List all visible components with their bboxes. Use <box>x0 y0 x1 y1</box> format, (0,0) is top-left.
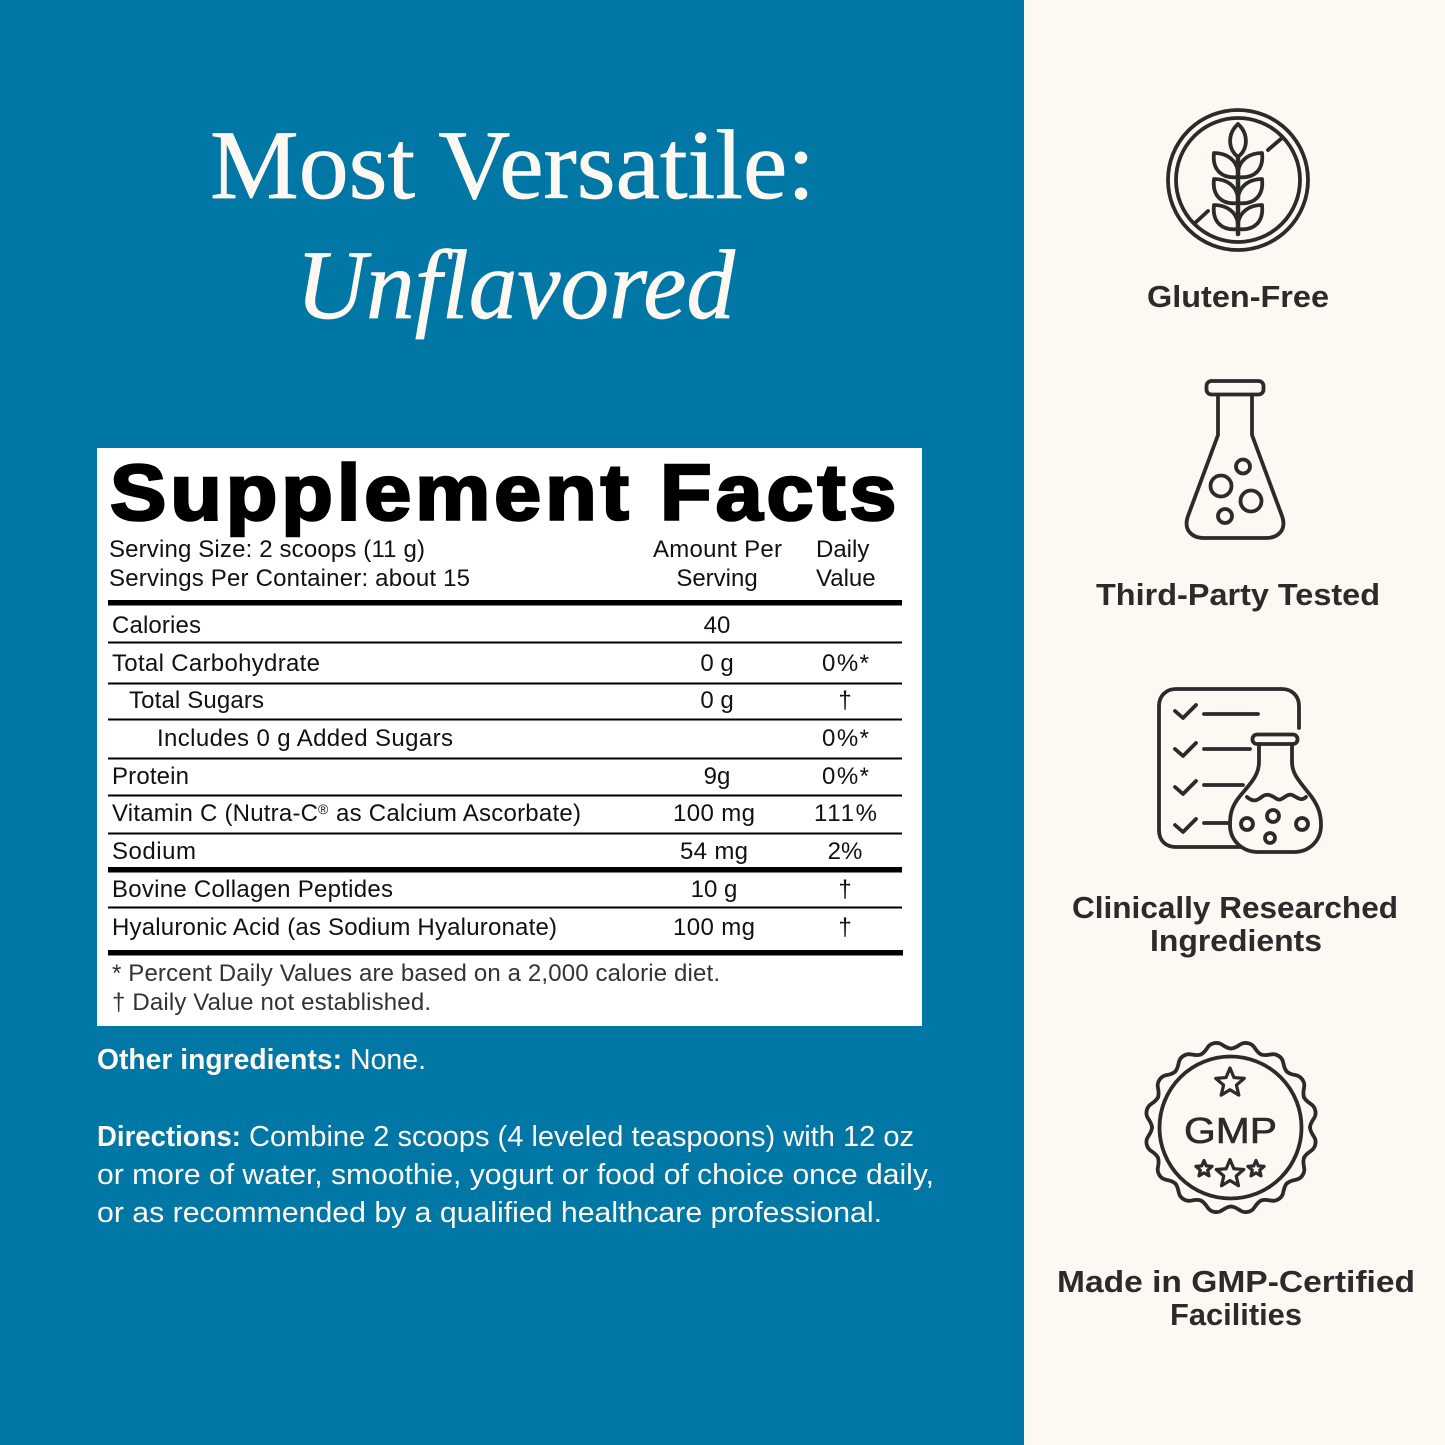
label: clinically researched ingredients <box>1072 890 1398 958</box>
row: hyaluronic acid: Hyaluronic Acid (as Sodium Hyaluronate) <box>112 914 557 941</box>
row: vitamin C: 111% <box>814 800 877 827</box>
text: directions: or as recommended by a qualified healthcare professional. <box>97 1197 882 1229</box>
row: hyaluronic acid: 100 mg <box>673 914 755 941</box>
footnotes: † Daily Value not established. <box>112 989 431 1016</box>
row: total carbohydrate <box>112 650 869 677</box>
row: calories: Calories <box>112 612 201 639</box>
text: other ingredients: Other ingredients: <box>97 1044 342 1076</box>
row: vitamin C: as Calcium Ascorbate) <box>336 800 581 827</box>
title: Most Versatile: <box>210 111 815 220</box>
serving information: Servings Per Container: about 15 <box>109 565 470 592</box>
panel: supplement facts table <box>97 448 922 1026</box>
row: bovine collagen peptides: Bovine Collagen Peptides <box>112 876 393 903</box>
row: sodium <box>112 838 862 865</box>
serving information: Serving <box>676 565 758 592</box>
panel: left blue background <box>0 0 1024 1445</box>
row: total sugars: Total Sugars <box>129 687 264 714</box>
row: hyaluronic acid: † <box>838 914 852 941</box>
row: total sugars: 0 g <box>700 687 734 714</box>
label: made in GMP-certified facilities: Made in GMP-Certified <box>1057 1264 1415 1299</box>
footnotes: * Percent Daily Values are based on a 2,000 calorie diet. <box>112 960 720 987</box>
row: protein: 9g <box>704 763 730 790</box>
icon: gluten-free wheat <box>1168 110 1308 250</box>
row: added sugars <box>157 725 869 752</box>
row: total sugars <box>129 687 852 714</box>
icon: clipboard with flask <box>1159 689 1321 852</box>
text: directions: Combine 2 scoops (4 leveled teaspoons) with 12 oz <box>249 1121 914 1153</box>
row: sodium: 2% <box>828 838 862 865</box>
row: bovine collagen peptides: 10 g <box>691 876 737 903</box>
label: gluten-free: Gluten-Free <box>1147 279 1329 314</box>
row: added sugars: 0%* <box>822 725 869 752</box>
serving information <box>109 536 876 592</box>
row: added sugars: Includes 0 g Added Sugars <box>157 725 453 752</box>
GMP wordmark: GMP <box>1184 1110 1277 1151</box>
scalloped edge <box>1144 1040 1318 1215</box>
row: protein: 0%* <box>822 763 869 790</box>
row: vitamin C: ® <box>318 801 329 817</box>
icon: lab flask <box>1187 381 1283 538</box>
row: sodium: 54 mg <box>680 838 748 865</box>
row: protein: Protein <box>112 763 189 790</box>
row: calories: 40 <box>704 612 730 639</box>
row: total carbohydrate: Total Carbohydrate <box>112 650 320 677</box>
row: vitamin C: Vitamin C (Nutra-C <box>112 800 318 827</box>
label: clinically researched ingredients: Ingredients <box>1150 923 1322 958</box>
row: bovine collagen peptides <box>112 876 852 903</box>
table heading: Supplement Facts <box>110 449 896 537</box>
text: directions: or more of water, smoothie, yogurt or food of choice once daily, <box>97 1159 934 1191</box>
label: made in GMP-certified facilities: Facilities <box>1170 1297 1302 1332</box>
row: vitamin C: 100 mg <box>673 800 755 827</box>
footnotes <box>112 960 720 1016</box>
text: directions <box>97 1121 934 1229</box>
label: made in GMP-certified facilities <box>1057 1264 1415 1332</box>
row: hyaluronic acid <box>112 914 852 941</box>
row: sodium: Sodium <box>112 838 196 865</box>
row: total carbohydrate: 0%* <box>822 650 869 677</box>
stars <box>1196 1068 1264 1186</box>
serving information: Amount Per <box>653 536 782 563</box>
text: directions: Directions: <box>97 1121 241 1153</box>
row: total sugars: † <box>838 687 852 714</box>
title: Unflavored <box>296 231 735 340</box>
title <box>210 111 815 340</box>
label: clinically researched ingredients: Clinically Researched <box>1072 890 1398 925</box>
row: calories <box>112 612 730 639</box>
row: vitamin C <box>112 800 877 827</box>
label: third-party tested: Third-Party Tested <box>1096 577 1380 612</box>
text: other ingredients: None. <box>350 1044 426 1076</box>
icon: GMP badge <box>1144 1040 1318 1215</box>
serving information: Serving Size: 2 scoops (11 g) <box>109 536 425 563</box>
row: protein <box>112 763 869 790</box>
serving information: Daily <box>816 536 869 563</box>
serving information: Value <box>816 565 876 592</box>
row: total carbohydrate: 0 g <box>700 650 734 677</box>
row: bovine collagen peptides: † <box>838 876 852 903</box>
